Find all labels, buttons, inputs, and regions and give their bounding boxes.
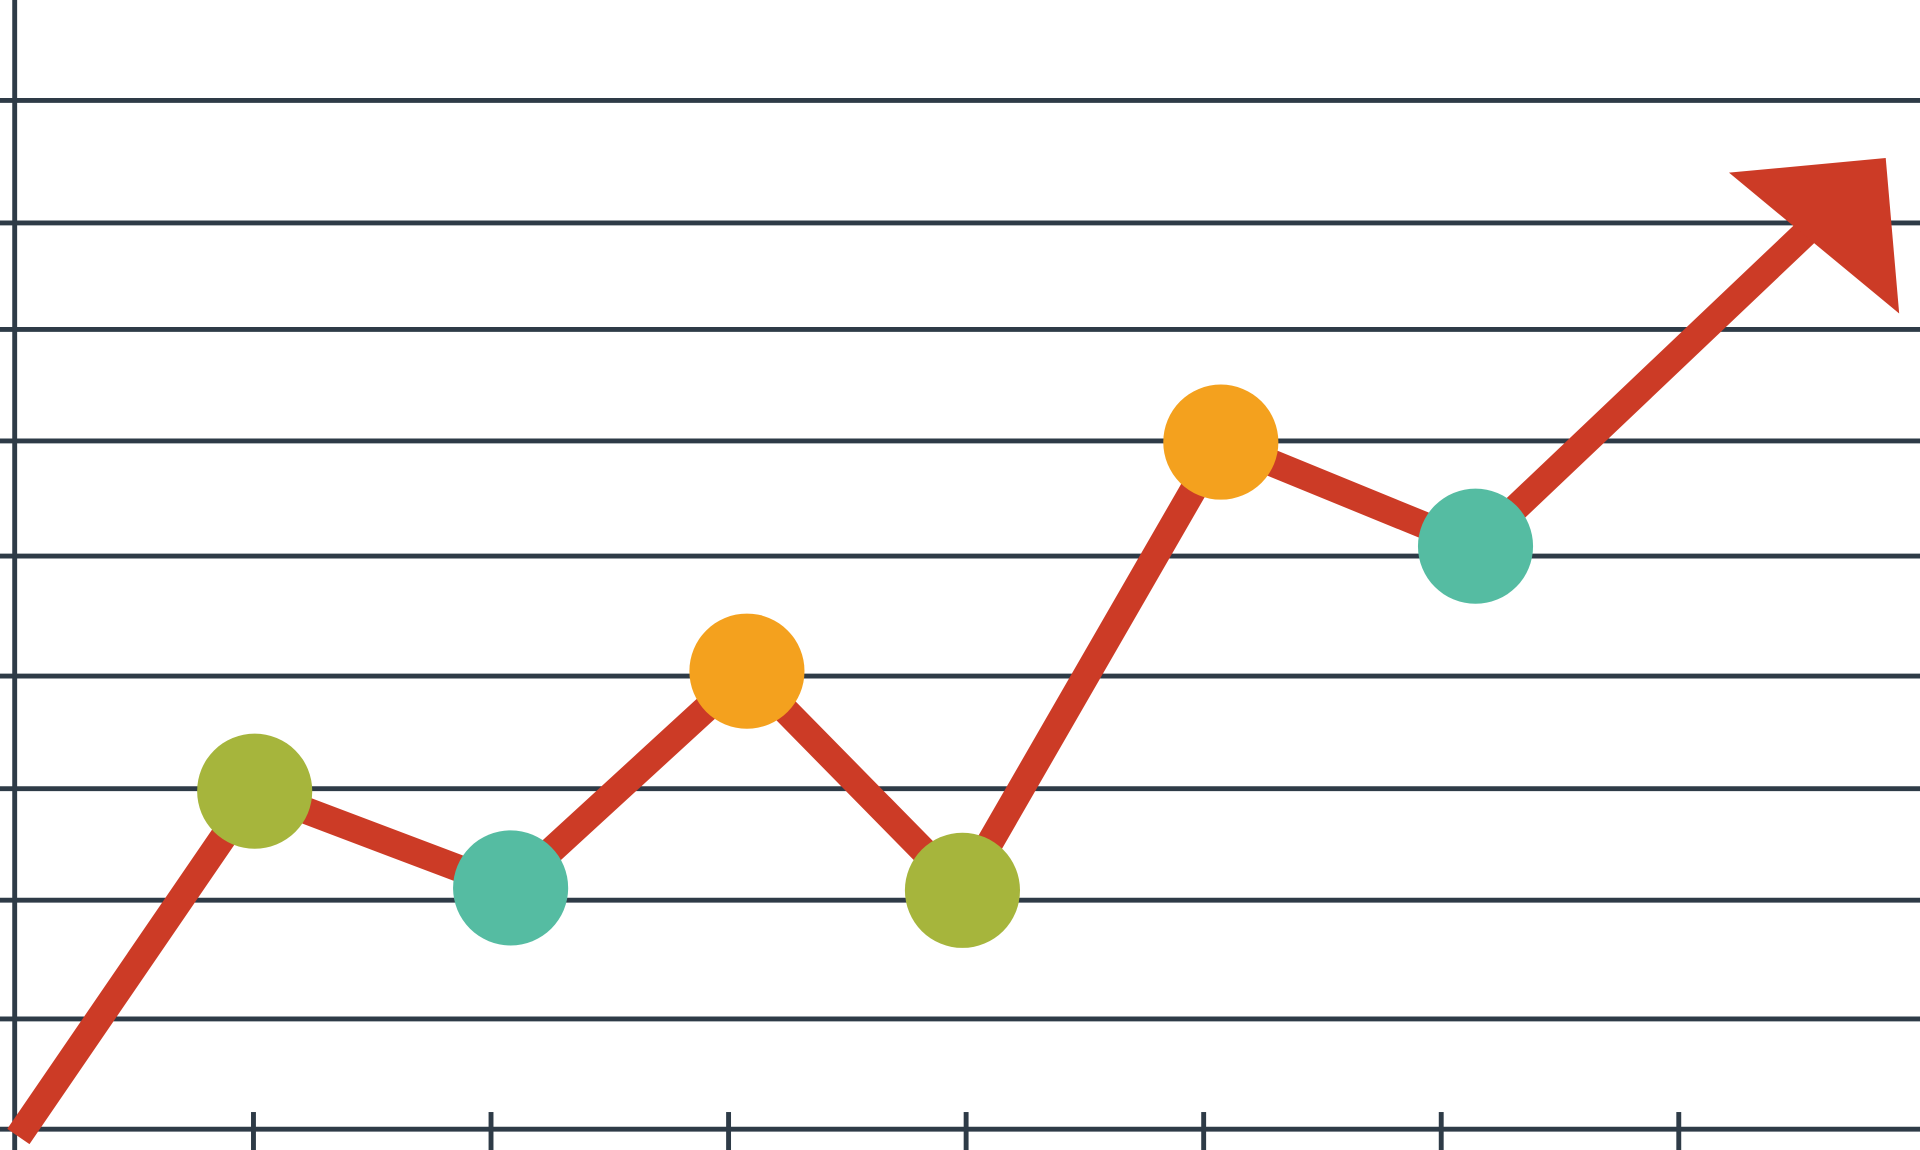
arrow head [1729, 158, 1899, 314]
data points [197, 385, 1533, 948]
trend line [18, 224, 1815, 1137]
